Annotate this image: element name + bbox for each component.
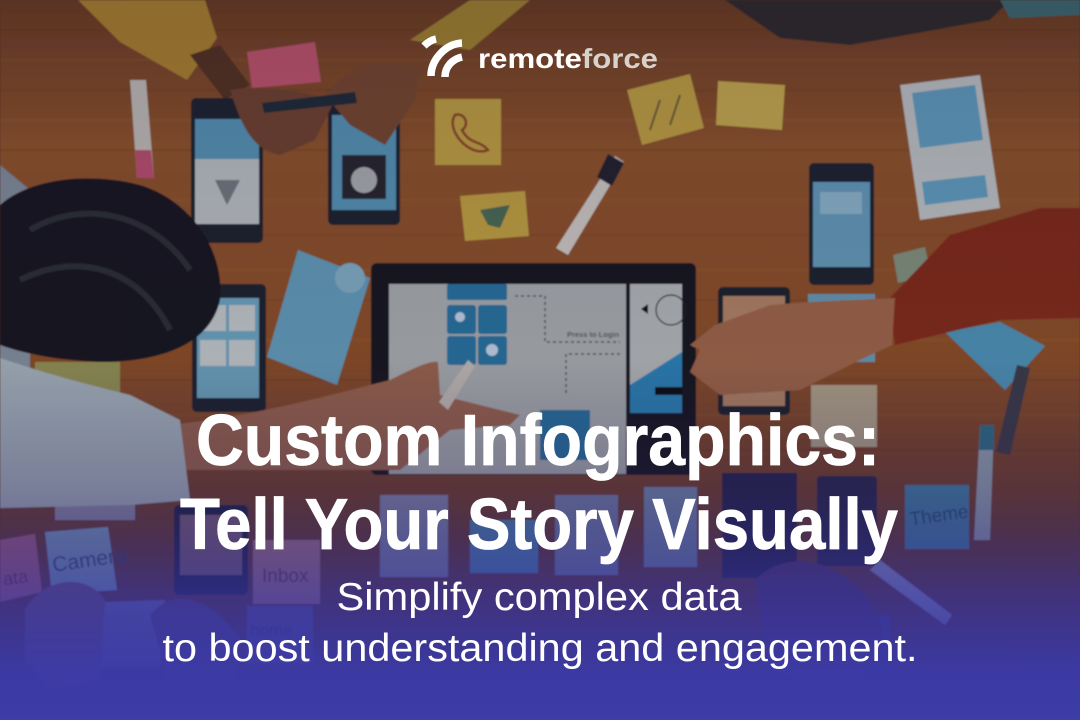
sticky notes: Theme — [908, 501, 970, 530]
upper hands — [230, 63, 420, 155]
smartphone mockups — [174, 88, 877, 595]
tablet showing app flow: Press to Login — [567, 330, 620, 339]
sticky notes: Inbox — [262, 566, 309, 587]
title: Custom Infographics: — [196, 401, 880, 481]
person: dark hair and white shirt — [0, 165, 220, 508]
sticky notes: ata — [2, 566, 30, 589]
title — [180, 401, 898, 565]
logo icon — [424, 39, 462, 77]
subtitle: Simplify complex data — [336, 576, 742, 619]
markers — [36, 80, 1030, 625]
lower hands — [25, 561, 883, 690]
reaching hand and red sleeve — [690, 208, 1080, 395]
logo text: remote force — [478, 43, 658, 74]
logo — [424, 39, 658, 77]
sticky notes — [0, 42, 970, 668]
sticky notes: home — [250, 621, 293, 640]
sticky notes: Camera — [51, 544, 128, 577]
pointing hand with marker — [170, 360, 520, 470]
title: Tell Your Story Visually — [180, 485, 898, 565]
yellow sleeves at top — [78, 0, 1080, 100]
wireframe cards — [55, 75, 1045, 675]
subtitle — [162, 576, 917, 670]
subtitle: to boost understanding and engagement. — [162, 627, 917, 670]
tablet showing app flow — [371, 263, 696, 475]
